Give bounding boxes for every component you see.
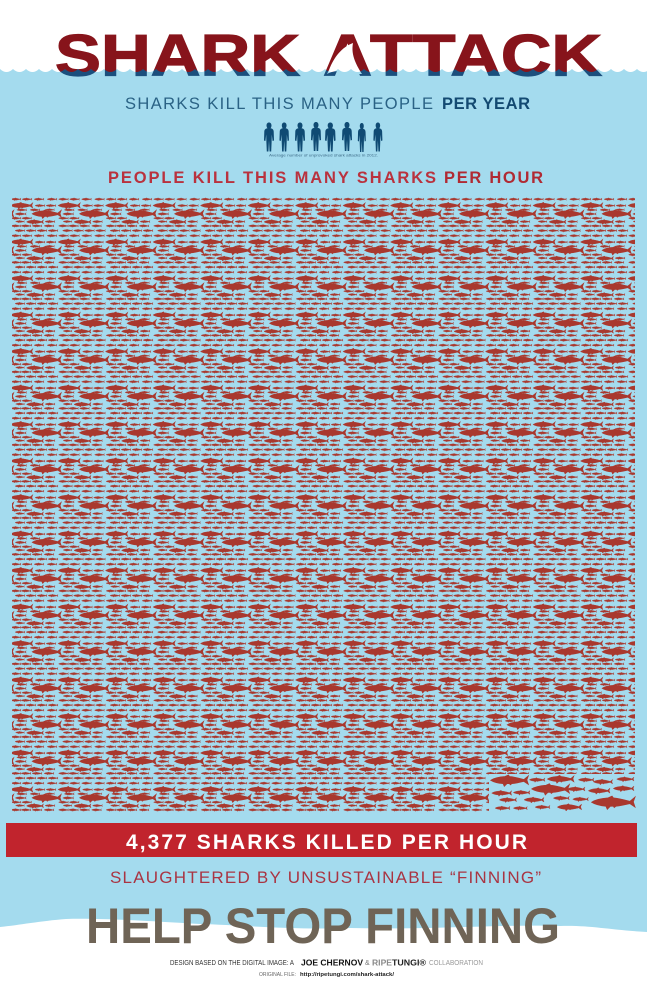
heading: sharks kill per year: PER YEAR [442,95,530,113]
heading: people kill per hour: PEOPLE KILL THIS MANY SHARKS [108,169,436,187]
banner: 4,377 sharks killed per hour: 4,377 SHARKS KILLED PER HOUR [126,831,527,854]
people caption: Average number of unprovoked shark attacks in 2012. [269,152,378,158]
title: SHARK ATTACK: TTACK [370,24,602,88]
banner: 4,377 sharks killed per hour [6,823,637,857]
larger sharks in the bottom right corner [491,775,635,811]
heading: sharks kill per year: SHARKS KILL THIS MANY PEOPLE [125,95,433,113]
footer source link: http://ripetungi.com/shark-attack/ [300,972,394,978]
heading: people kill per hour: PER HOUR [444,169,543,187]
footer credit line [170,958,483,968]
footer credit line: COLLABORATION [429,960,483,967]
icon: shark fin in the letter A [327,43,362,74]
footer credit line: TUNGI® [392,958,427,968]
subheading: slaughtered by finning: SLAUGHTERED BY UNSUSTAINABLE “FINNING” [110,868,541,887]
footer source link: ORIGINAL FILE: [259,972,296,978]
chart: field of 4,377 shark silhouettes [12,197,639,814]
title: SHARK ATTACK: SHARK [55,24,300,88]
title: SHARK ATTACK: A [323,24,372,88]
icon row: eight people silhouettes [264,122,382,152]
footer credit line: JOE CHERNOV [301,958,363,968]
title: SHARK ATTACK [55,24,602,88]
footer credit line: DESIGN BASED ON THE DIGITAL IMAGE: A [170,960,294,967]
footer credit line: RIPE [372,958,392,968]
footer credit line: & [365,960,370,967]
call to action: help stop finning: HELP STOP FINNING [86,898,560,954]
footer source link [259,972,394,978]
